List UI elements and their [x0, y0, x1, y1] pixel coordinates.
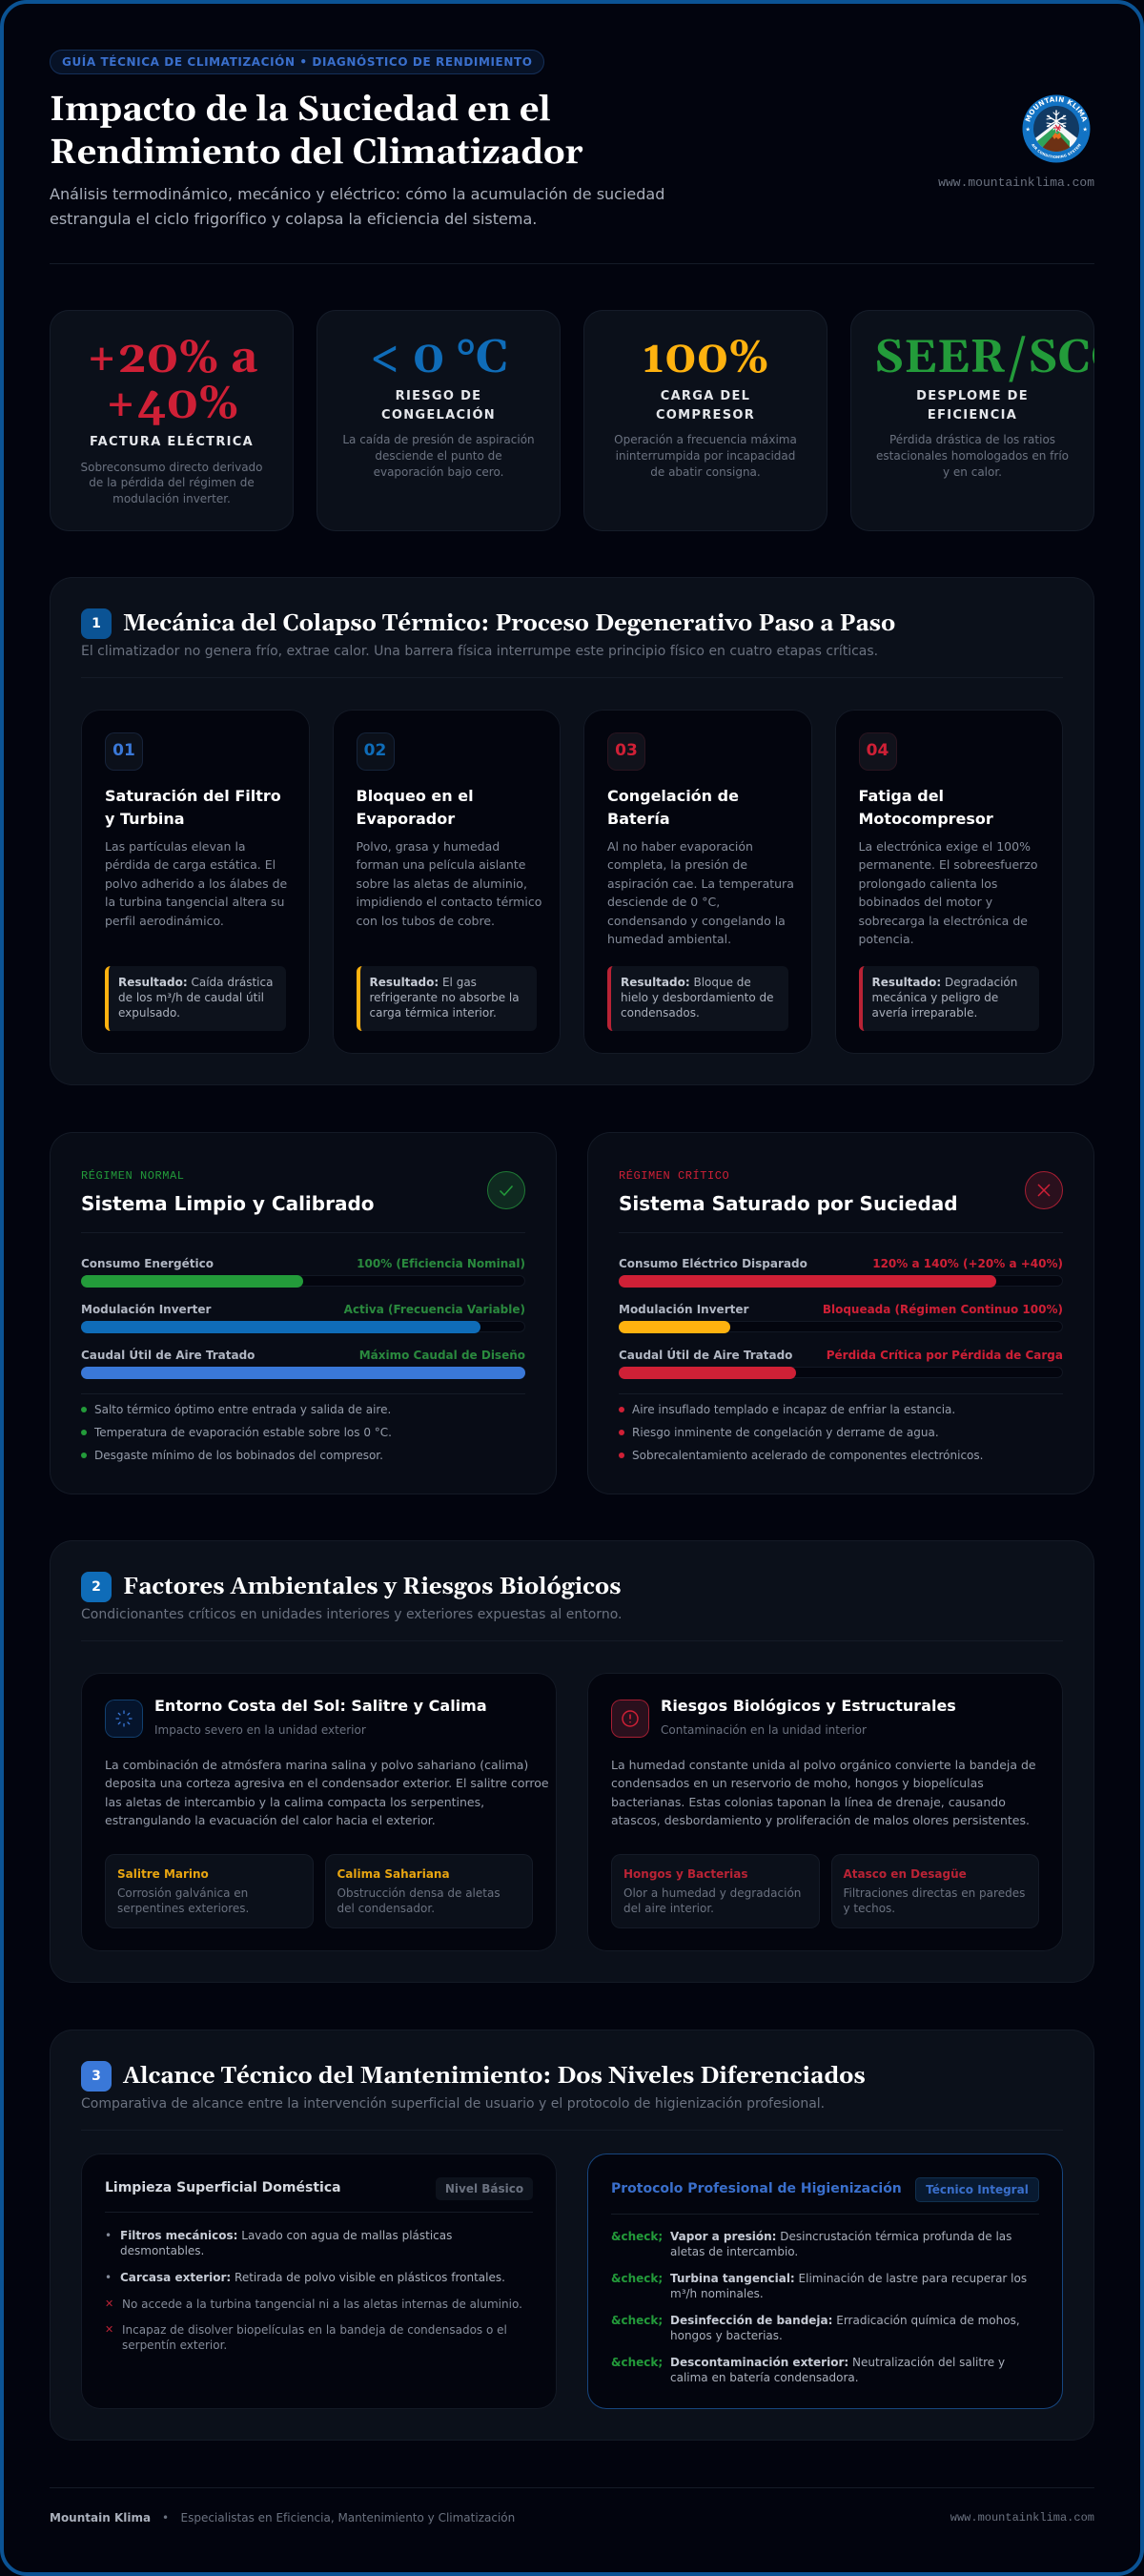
step number: [858, 732, 896, 771]
panel title: Sistema Saturado por Suciedad: [619, 1192, 958, 1215]
stat description: ininterrumpida por incapacidad: [616, 449, 795, 463]
stat value: 100%: [642, 330, 769, 388]
metric: consumo eléctrico: Consumo Eléctrico Disparado: [619, 1257, 807, 1270]
professional items list: aletas de intercambio.: [670, 2245, 798, 2258]
step text: humedad ambiental.: [607, 932, 731, 946]
stat value: +40%: [105, 376, 238, 434]
icon: salt particles: [105, 1700, 143, 1738]
mini card: salitre marino: Corrosión galvánica en: [117, 1886, 248, 1900]
mini card: atasco en desagüe: [831, 1854, 1039, 1928]
step text: permanente. El sobreesfuerzo: [858, 857, 1038, 872]
step card 04: [835, 710, 1063, 1054]
stat description: La caída de presión de aspiración: [342, 433, 535, 446]
level pill: [915, 2177, 1039, 2202]
mini card: calima sahariana: Calima Sahariana: [337, 1867, 450, 1881]
step title: [607, 787, 739, 828]
mini card: salitre marino: Salitre Marino: [117, 1867, 209, 1881]
step text: bobinados del motor y: [858, 895, 992, 909]
professional items list: hongos y bacterias.: [670, 2329, 783, 2342]
step text: [105, 839, 287, 928]
stat label: FACTURA ELÉCTRICA: [90, 435, 254, 449]
professional items list: m³/h nominales.: [670, 2287, 764, 2300]
section subtitle: El climatizador no genera frío, extrae calor. Una barrera física interrumpe este principio físico en cuatro etapas críticas.: [81, 644, 878, 659]
step result: refrigerante no absorbe la: [370, 991, 520, 1004]
stat value: < 0 °C: [369, 330, 508, 388]
panel title: Sistema Limpio y Calibrado: [81, 1192, 375, 1215]
step title: Saturación del Filtro: [105, 787, 281, 805]
basic items list: desmontables.: [120, 2244, 204, 2257]
stat description: [342, 433, 535, 479]
icon: Mountain Klima logo: MOUNTAIN KLIMA: [1025, 96, 1087, 122]
mini card: calima sahariana: Obstrucción densa de aletas: [337, 1886, 500, 1900]
mini card: atasco en desagüe: y techos.: [843, 1902, 895, 1915]
step title: Congelación de: [607, 787, 739, 805]
card text: atascos, desbordamiento y proliferación de malos olores persistentes.: [611, 1813, 1030, 1827]
basic items list: Filtros mecánicos: Lavado con agua de mallas plásticas: [120, 2229, 452, 2242]
stat description: estacionales homologados en frío: [876, 449, 1069, 463]
step title: Evaporador: [357, 810, 455, 828]
panel: section 1 mecánica del colapso térmico: [50, 577, 1094, 1085]
title: Rendimiento del Climatizador: [50, 133, 583, 175]
step text: sobrecarga la electrónica de: [858, 914, 1028, 928]
regime label: RÉGIMEN CRÍTICO: [619, 1169, 729, 1183]
card subtitle: Contaminación en la unidad interior: [661, 1723, 867, 1737]
step result: hielo y desbordamiento de: [621, 991, 774, 1004]
header: [50, 50, 1094, 228]
section number badge: [81, 2061, 112, 2092]
stat label: [656, 389, 755, 422]
step title: y Turbina: [105, 810, 185, 828]
step result: de los m³/h de caudal útil: [118, 991, 264, 1004]
icon: alert: [611, 1700, 649, 1738]
step text: Las partículas elevan la: [105, 839, 246, 854]
section number badge: 2: [92, 1579, 101, 1595]
step result: mecánica y peligro de: [871, 991, 998, 1004]
metric: consumo energético: 100% (Eficiencia Nominal): [357, 1257, 525, 1270]
mini card: calima sahariana: del condensador.: [337, 1902, 435, 1915]
icon: Mountain Klima logo: AIR CONDITIONING SYSTEM: [1032, 143, 1081, 158]
step text: Al no haber evaporación: [607, 839, 753, 854]
footer: [50, 2511, 1094, 2524]
metric: modulación inverter: Modulación Inverter: [81, 1303, 211, 1316]
metric: modulación inverter: Modulación Inverter: [619, 1303, 748, 1316]
metric: caudal útil: Pérdida Crítica por Pérdida de Carga: [827, 1349, 1063, 1362]
card text: las aletas de intercambio y la calima compacta los serpentines,: [105, 1795, 484, 1809]
mini card: calima sahariana: [324, 1854, 533, 1928]
step result: Resultado: Bloque de: [621, 976, 751, 989]
section number badge: 1: [92, 616, 101, 631]
card text: [105, 1758, 549, 1827]
mini card: salitre marino: [105, 1854, 313, 1928]
step result: expulsado.: [118, 1006, 180, 1020]
step text: [357, 839, 541, 928]
card text: La combinación de atmósfera marina salina y polvo sahariano (calima): [105, 1758, 528, 1772]
step title: [858, 787, 993, 828]
step card 03: [583, 710, 812, 1054]
metric: modulación inverter: [619, 1303, 1063, 1333]
step card 02: [332, 710, 561, 1054]
basic items list: No accede a la turbina tangencial ni a las aletas internas de aluminio.: [122, 2297, 522, 2310]
step text: perfil aerodinámico.: [105, 914, 224, 928]
step card 01: [81, 710, 309, 1054]
section number badge: 3: [92, 2069, 101, 2084]
stat card: carga del compresor: [583, 310, 827, 531]
step result: avería irreparable.: [871, 1006, 977, 1020]
stat description: desciende el punto de: [375, 449, 502, 463]
stat description: [80, 460, 263, 505]
metric: consumo eléctrico: 120% a 140% (+20% a +40%): [872, 1257, 1063, 1270]
panel: section 3 alcance técnico: [50, 2030, 1094, 2441]
mini card: hongos y bacterias: Olor a humedad y degradación: [623, 1886, 801, 1900]
professional items list: Turbina tangencial: Eliminación de lastre para recuperar los: [670, 2272, 1027, 2285]
metric: caudal útil: [81, 1348, 525, 1379]
step title: Fatiga del: [858, 787, 944, 805]
symptoms list: [619, 1403, 983, 1462]
stat value: +20% a: [86, 330, 257, 388]
step result: [357, 966, 537, 1031]
step text: completa, la presión de: [607, 857, 747, 872]
stat card: desplome de eficiencia: [850, 310, 1094, 531]
step title: [105, 787, 281, 828]
card: protocolo profesional: calima en batería condensadora.: [670, 2371, 859, 2384]
mini card: hongos y bacterias: del aire interior.: [623, 1902, 714, 1915]
section number badge: [81, 608, 112, 639]
basic items list: •: [105, 2229, 112, 2242]
basic items list: •: [105, 2270, 112, 2283]
step result: Resultado: Caída drástica: [118, 976, 273, 989]
stat description: Sobreconsumo directo derivado: [80, 460, 263, 473]
card subtitle: Impacto severo en la unidad exterior: [154, 1723, 366, 1737]
footer url: www.mountainklima.com: [950, 2511, 1094, 2524]
professional items list: &check;: [611, 2230, 663, 2243]
basic items list: Carcasa exterior: Retirada de polvo visible en plásticos frontales.: [120, 2270, 505, 2283]
snowflake: [1047, 111, 1066, 132]
stat label: RIESGO DE: [396, 389, 481, 403]
step text: Polvo, grasa y humedad: [357, 839, 500, 854]
stat label: CARGA DEL: [661, 389, 750, 403]
step title: [357, 787, 474, 828]
stat card: factura eléctrica: [50, 310, 294, 531]
level pill: Nivel Básico: [445, 2182, 523, 2195]
metric: caudal útil: Caudal Útil de Aire Tratado: [619, 1349, 792, 1362]
metric: caudal útil: [619, 1348, 1063, 1379]
section subtitle: Condicionantes críticos en unidades interiores y exteriores expuestas al entorno.: [81, 1607, 622, 1622]
professional items list: &check;: [611, 2272, 663, 2285]
icon: Mountain Klima logo: ★: [1026, 126, 1031, 134]
step text: condensando y congelando la: [607, 914, 786, 928]
eyebrow badge: GUÍA TÉCNICA DE CLIMATIZACIÓN • DIAGNÓSTICO DE RENDIMIENTO: [62, 55, 533, 69]
step result: condensados.: [621, 1006, 700, 1020]
card text: La humedad constante unida al polvo orgánico convierte la bandeja de: [611, 1758, 1036, 1772]
level pill: [436, 2177, 533, 2200]
stat label: CONGELACIÓN: [381, 408, 496, 422]
stat description: y en calor.: [943, 465, 1002, 479]
panel: section 2 factores ambientales: [50, 1540, 1094, 1983]
metric: modulación inverter: Activa (Frecuencia Variable): [344, 1303, 525, 1316]
mini card: atasco en desagüe: Filtraciones directas en paredes: [843, 1886, 1025, 1900]
stat value: [86, 330, 257, 434]
step result: [607, 966, 787, 1031]
professional items list: Vapor a presión: Desincrustación térmica profunda de las: [670, 2230, 1011, 2243]
stat description: Operación a frecuencia máxima: [614, 433, 797, 446]
step text: potencia.: [858, 932, 914, 946]
step text: polvo adherido a los álabes de: [105, 876, 287, 891]
metric: consumo energético: Consumo Energético: [81, 1257, 214, 1270]
card text: condensados en un reservorio de moho, hongos y biopelículas: [611, 1776, 984, 1790]
step result: Resultado: Degradación: [871, 976, 1017, 989]
stat description: [876, 433, 1069, 479]
footer brand: Mountain Klima: [50, 2511, 151, 2524]
icon: Mountain Klima logo: [1022, 95, 1091, 162]
icon: check: [487, 1171, 525, 1209]
step number: 01: [112, 741, 135, 760]
step text: forman una película aislante: [357, 857, 525, 872]
subtitle: Análisis termodinámico, mecánico y eléctrico: cómo la acumulación de suciedad: [50, 185, 664, 203]
benefits list: Desgaste mínimo de los bobinados del compresor.: [94, 1449, 383, 1462]
step number: 03: [615, 741, 638, 760]
benefits list: Salto térmico óptimo entre entrada y salida de aire.: [94, 1403, 391, 1416]
professional items list: &check;: [611, 2314, 663, 2327]
stat description: de abatir consigna.: [650, 465, 761, 479]
stat description: de la pérdida del régimen de: [89, 476, 255, 489]
card text: [611, 1758, 1036, 1827]
regime label: RÉGIMEN NORMAL: [81, 1169, 185, 1183]
card text: deposita una corteza agresiva en el condensador exterior. El salitre corroe: [105, 1776, 549, 1790]
card title: Protocolo Profesional de Higienización: [611, 2181, 902, 2196]
step title: Bloqueo en el: [357, 787, 474, 805]
stat description: Pérdida drástica de los ratios: [889, 433, 1055, 446]
basic items list: ✕: [105, 2297, 113, 2310]
panel: sistema limpio: [50, 1132, 557, 1494]
step text: con los tubos de cobre.: [357, 914, 495, 928]
metric: consumo energético: [81, 1257, 525, 1288]
step text: aspiración cae. La temperatura: [607, 876, 794, 891]
professional items list: Descontaminación exterior: Neutralización del salitre y: [670, 2356, 1005, 2369]
website url: www.mountainklima.com: [938, 175, 1094, 190]
section subtitle: Comparativa de alcance entre la intervención superficial de usuario y el protocolo de higienización profesional.: [81, 2096, 825, 2112]
step number: 02: [364, 741, 386, 760]
title: Impacto de la Suciedad en el: [50, 90, 551, 133]
step text: [607, 839, 794, 946]
card title: Riesgos Biológicos y Estructurales: [661, 1697, 956, 1715]
card: protocolo profesional: [587, 2154, 1063, 2409]
step result: [858, 966, 1039, 1031]
eyebrow badge: [50, 50, 544, 74]
professional items list: Desinfección de bandeja: Erradicación química de mohos,: [670, 2314, 1020, 2327]
step text: desciende de 0 °C,: [607, 895, 720, 909]
footer separator: •: [162, 2511, 169, 2524]
stat label: [381, 389, 496, 422]
level pill: Técnico Integral: [926, 2183, 1029, 2196]
card text: estrangulando la evacuación del calor hacia el exterior.: [105, 1813, 436, 1827]
stat description: [614, 433, 797, 479]
icon: cross: [1025, 1171, 1063, 1209]
section heading: Alcance Técnico del Mantenimiento: Dos Niveles Diferenciados: [123, 2063, 866, 2092]
icon: Mountain Klima logo: ★: [1083, 126, 1088, 134]
stat label: COMPRESOR: [656, 408, 755, 422]
step text: impidiendo el contacto térmico: [357, 895, 541, 909]
step text: pérdida de carga estática. El: [105, 857, 276, 872]
stat description: modulación inverter.: [112, 492, 231, 505]
step text: prolongado calienta los: [858, 876, 997, 891]
symptoms list: Aire insuflado templado e incapaz de enfriar la estancia.: [632, 1403, 955, 1416]
step result: carga térmica interior.: [370, 1006, 497, 1020]
footer tagline: Especialistas en Eficiencia, Mantenimiento y Climatización: [181, 2511, 515, 2524]
mini card: hongos y bacterias: Hongos y Bacterias: [623, 1867, 747, 1881]
step text: sobre las aletas de aluminio,: [357, 876, 527, 891]
professional items list: &check;: [611, 2356, 663, 2369]
step text: la turbina tangencial altera su: [105, 895, 284, 909]
stat description: evaporación bajo cero.: [374, 465, 503, 479]
professional items list: [611, 2230, 1027, 2384]
stat card: riesgo de congelación: [317, 310, 561, 531]
card: entorno costa del sol: [81, 1673, 557, 1951]
mini card: hongos y bacterias: [611, 1854, 820, 1928]
section heading: Mecánica del Colapso Térmico: Proceso Degenerativo Paso a Paso: [123, 610, 895, 639]
step number: [607, 732, 645, 771]
basic items list: [105, 2229, 522, 2352]
card: limpieza doméstica: [81, 2154, 557, 2409]
stat label: [916, 389, 1029, 422]
metric: consumo eléctrico: [619, 1257, 1063, 1288]
step result: [105, 966, 286, 1031]
step number: 04: [867, 741, 889, 760]
metric: modulación inverter: Bloqueada (Régimen Continuo 100%): [823, 1303, 1063, 1316]
basic items list: ✕: [105, 2323, 113, 2336]
basic items list: Incapaz de disolver biopelículas en la bandeja de condensados o el: [122, 2323, 507, 2337]
step text: [858, 839, 1038, 946]
step number: [357, 732, 395, 771]
panel: sistema saturado: [587, 1132, 1094, 1494]
mini card: salitre marino: serpentines exteriores.: [117, 1902, 249, 1915]
step text: La electrónica exige el 100%: [858, 839, 1031, 854]
step result: Resultado: El gas: [370, 976, 477, 989]
benefits list: Temperatura de evaporación estable sobre los 0 °C.: [94, 1426, 392, 1439]
mini card: atasco en desagüe: Atasco en Desagüe: [843, 1867, 967, 1881]
subtitle: estrangula el ciclo frigorífico y colapsa la eficiencia del sistema.: [50, 210, 537, 228]
step title: Motocompresor: [858, 810, 993, 828]
metric: caudal útil: Máximo Caudal de Diseño: [359, 1349, 525, 1362]
symptoms list: Sobrecalentamiento acelerado de componentes electrónicos.: [632, 1449, 983, 1462]
card title: Limpieza Superficial Doméstica: [105, 2180, 341, 2195]
card text: bacterianas. Estas colonias taponan la línea de drenaje, causando: [611, 1795, 1006, 1809]
symptoms list: Riesgo inminente de congelación y derrame de agua.: [632, 1426, 939, 1439]
stat label: DESPLOME DE: [916, 389, 1029, 403]
step number: [105, 732, 143, 771]
stat label: EFICIENCIA: [928, 408, 1017, 422]
title: [50, 90, 583, 175]
section number badge: [81, 1572, 112, 1602]
metric: modulación inverter: [81, 1303, 525, 1333]
card: riesgos biológicos: [587, 1673, 1063, 1951]
basic items list: serpentín exterior.: [122, 2339, 227, 2352]
card title: Entorno Costa del Sol: Salitre y Calima: [154, 1697, 487, 1715]
section heading: Factores Ambientales y Riesgos Biológicos: [123, 1574, 621, 1602]
subtitle: [50, 185, 664, 228]
benefits list: [81, 1403, 392, 1462]
step title: Batería: [607, 810, 670, 828]
metric: caudal útil: Caudal Útil de Aire Tratado: [81, 1349, 255, 1362]
